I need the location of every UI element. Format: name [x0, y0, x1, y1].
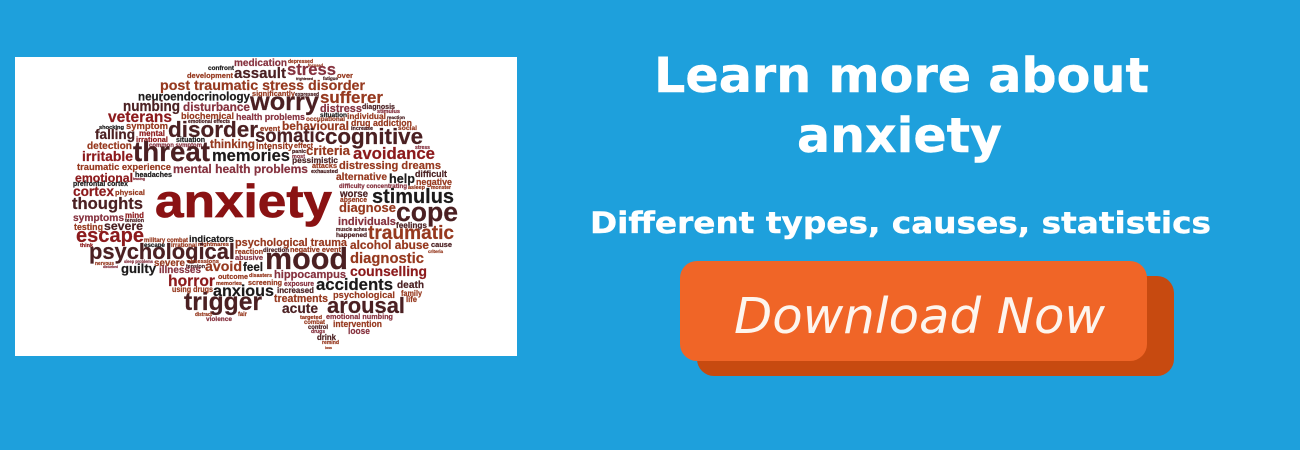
brain-shaped word cloud: increase — [351, 126, 373, 132]
brain-shaped word cloud: obsessions — [187, 259, 219, 265]
brain-shaped word cloud: panic — [292, 149, 306, 155]
brain-shaped word cloud: cause — [431, 240, 452, 249]
brain-shaped word cloud: alternative — [336, 172, 387, 183]
brain-shaped word cloud: occupational — [306, 116, 345, 123]
brain-shaped word cloud: over — [337, 71, 353, 80]
brain-shaped word cloud: direction — [263, 248, 289, 254]
subheading: Different types, causes, statistics — [590, 206, 1211, 240]
word: threat: threat — [133, 136, 210, 167]
brain-shaped word cloud: assault — [234, 65, 286, 82]
brain-shaped word cloud: development — [187, 71, 233, 80]
brain-shaped word cloud: medication — [234, 58, 287, 69]
brain-shaped word cloud: irrational — [136, 135, 168, 144]
brain-shaped word cloud: mental health problems — [173, 162, 308, 176]
brain-shaped word cloud: feelings — [396, 221, 428, 230]
button: download now: Download Now — [734, 288, 1106, 345]
brain-shaped word cloud: indicators — [189, 233, 234, 244]
brain-shaped word cloud: acute — [282, 301, 318, 316]
word: psychological: psychological — [89, 239, 235, 264]
word: anxiety: anxiety — [155, 175, 332, 227]
brain-shaped word cloud: disturbed — [103, 264, 118, 269]
brain-shaped word cloud: loss — [325, 345, 333, 350]
button: download now — [680, 261, 1174, 376]
word: worry: worry — [249, 88, 319, 116]
brain-shaped word cloud: military combat — [144, 238, 188, 244]
brain-shaped word cloud: increased — [277, 286, 314, 295]
brain-shaped word cloud: diagnostic — [350, 251, 424, 267]
brain-shaped word cloud: psychological — [333, 290, 395, 300]
brain-shaped word cloud: situation — [320, 112, 347, 119]
brain-shaped word cloud: horror — [168, 273, 215, 290]
brain-shaped word cloud: irritable — [82, 148, 133, 164]
brain-shaped word cloud: criteria — [306, 143, 351, 158]
brain-shaped word cloud: nightmares — [198, 242, 229, 248]
brain-shaped word cloud: veterans — [108, 109, 172, 126]
brain-shaped word cloud: help — [389, 172, 415, 186]
brain-shaped word cloud: emotional — [75, 171, 133, 185]
brain-shaped word cloud: health problems — [236, 112, 305, 122]
brain-shaped word cloud: nervous — [95, 261, 114, 267]
brain-shaped word cloud: fair — [238, 312, 248, 318]
brain-shaped word cloud: diagnosis — [362, 102, 395, 111]
brain-shaped word cloud: shocking — [99, 125, 125, 131]
brain-shaped word cloud: family — [401, 289, 422, 298]
brain-shaped word cloud: outcome — [218, 274, 248, 281]
brain-shaped word cloud: situation — [176, 137, 205, 144]
brain-shaped word cloud: mind — [125, 211, 144, 220]
brain-shaped word cloud: absence — [340, 197, 367, 204]
brain-shaped word cloud: drug addiction — [351, 118, 412, 128]
brain-shaped word cloud: escape — [144, 242, 166, 249]
brain-shaped word cloud: individuals — [338, 216, 396, 228]
panel: word cloud image — [15, 57, 517, 356]
brain-shaped word cloud: difficult — [415, 169, 447, 179]
brain-shaped word cloud: symptom — [126, 120, 168, 131]
brain-shaped word cloud: intensity — [256, 141, 293, 151]
brain-shaped word cloud: criteria — [428, 249, 443, 254]
brain-shaped word cloud — [72, 58, 458, 350]
brain-shaped word cloud: violence — [206, 317, 233, 323]
brain-shaped word cloud: exhausted — [311, 169, 338, 175]
brain-shaped word cloud: headaches — [135, 170, 172, 179]
brain-shaped word cloud: severe — [104, 219, 143, 233]
brain-shaped word cloud: physical — [115, 188, 145, 197]
brain-shaped word cloud: exposure — [284, 281, 314, 288]
word: trigger: trigger — [184, 289, 262, 316]
brain-shaped word cloud: stress — [287, 61, 336, 79]
brain-shaped word cloud: targeted — [300, 315, 322, 321]
brain-shaped word cloud: anxious — [213, 283, 274, 300]
brain-shaped word cloud: remind — [322, 340, 339, 346]
brain-shaped word cloud: worse — [339, 189, 369, 200]
brain-shaped word cloud: fatigue — [323, 76, 338, 81]
brain-shaped word cloud: reaction — [235, 249, 263, 256]
brain-shaped word cloud: behavioural — [282, 119, 349, 133]
brain-shaped word cloud: disturbance — [183, 100, 250, 114]
brain-shaped word cloud: expressed — [295, 92, 319, 98]
brain-shaped word cloud: severe — [154, 258, 186, 269]
brain-shaped word cloud: life — [406, 295, 418, 304]
brain-shaped word cloud: individual — [347, 111, 386, 121]
brain-shaped word cloud: depressed — [288, 59, 313, 65]
brain-shaped word cloud: attacks — [312, 163, 337, 170]
brain-shaped word cloud: disasters — [249, 273, 272, 279]
brain-shaped word cloud: illnesses — [159, 265, 201, 276]
brain-shaped word cloud: cortex — [73, 184, 114, 199]
brain-shaped word cloud: focused — [308, 63, 323, 68]
brain-shaped word cloud: hippocampus — [274, 269, 346, 281]
brain-shaped word cloud: combat — [304, 319, 326, 326]
brain-shaped word cloud: sleep problems — [124, 259, 153, 264]
brain-shaped word cloud: happened — [336, 232, 367, 239]
brain-shaped word cloud: testing — [74, 222, 103, 232]
brain-shaped word cloud: muscle aches — [336, 227, 367, 233]
brain-shaped word cloud: avoid — [205, 259, 242, 275]
brain-shaped word cloud: think — [80, 243, 94, 249]
brain-shaped word cloud: guilty — [121, 261, 157, 276]
brain-shaped word cloud: feel — [243, 261, 263, 274]
brain-shaped word cloud: abusive — [235, 253, 263, 262]
brain-shaped word cloud: asleep — [408, 185, 425, 191]
brain-shaped word cloud: mental — [139, 129, 165, 138]
brain-shaped word cloud: somatic — [255, 125, 325, 147]
brain-shaped word cloud: traumatic — [368, 223, 454, 244]
brain-shaped word cloud: teasing — [133, 177, 145, 181]
brain-shaped word cloud: death — [397, 280, 424, 291]
brain-shaped word cloud: difficulty concentrating — [339, 184, 407, 190]
brain-shaped word cloud: loose — [348, 326, 370, 336]
brain-shaped word cloud: pessimistic — [292, 155, 338, 165]
brain-shaped word cloud: social — [398, 125, 417, 132]
brain-shaped word cloud: distress — [320, 103, 362, 115]
brain-shaped word cloud: detection — [87, 141, 132, 152]
brain-shaped word cloud: prefrontal cortex — [73, 181, 128, 188]
brain-shaped word cloud: falling — [95, 127, 135, 142]
brain-shaped word cloud: stimulus — [377, 109, 400, 115]
brain-shaped word cloud: tension — [186, 264, 206, 270]
brain-shaped word cloud: tension — [125, 218, 145, 224]
brain-shaped word cloud: biochemical — [181, 111, 234, 121]
brain-shaped word cloud: numbing — [123, 99, 180, 115]
brain-shaped word cloud: effect — [294, 143, 314, 150]
brain-shaped word cloud: significantly — [252, 89, 296, 98]
brain-shaped word cloud: most — [292, 154, 305, 160]
brain-shaped word cloud: common symptom — [149, 143, 202, 149]
brain-shaped word cloud: using drugs — [172, 285, 213, 294]
brain-shaped word cloud: avoidance — [353, 144, 435, 163]
brain-shaped word cloud: treatments — [274, 293, 328, 305]
brain-shaped word cloud: frightened — [296, 76, 313, 81]
brain-shaped word cloud: accidents — [316, 275, 393, 294]
brain-shaped word cloud: event — [260, 124, 281, 133]
word: cope: cope — [396, 197, 458, 227]
brain-shaped word cloud: monster — [431, 185, 451, 191]
word: disorder: disorder — [168, 117, 258, 142]
brain-shaped word cloud: memories — [212, 147, 290, 165]
heading: learn more about anxiety: anxiety — [797, 108, 1002, 164]
brain-shaped word cloud: screening — [248, 278, 282, 287]
brain-shaped word cloud: memories — [216, 281, 242, 287]
brain-shaped word cloud: emotional effects — [188, 119, 230, 125]
brain-shaped word cloud: negative — [416, 177, 452, 187]
brain-shaped word cloud: distract — [195, 312, 212, 318]
brain-shaped word cloud: irrational — [171, 243, 197, 249]
brain-shaped word cloud: drugs — [311, 329, 325, 335]
brain-shaped word cloud: emotional numbing — [326, 312, 393, 321]
brain-shaped word cloud: intervention — [333, 319, 382, 329]
brain-shaped word cloud: neuroendocrinology — [138, 90, 251, 104]
word: arousal: arousal — [327, 293, 405, 318]
heading: learn more about anxiety — [654, 48, 1149, 164]
brain-shaped word cloud: counselling — [350, 263, 427, 279]
brain-shaped word cloud: drink — [317, 333, 337, 342]
brain-shaped word cloud: alcohol abuse — [350, 238, 429, 252]
brain-shaped word cloud: stimulus — [372, 186, 454, 208]
brain-shaped word cloud: control — [308, 325, 328, 331]
word: cognitive: cognitive — [325, 124, 423, 149]
brain-shaped word cloud: negative event — [290, 247, 342, 254]
brain-shaped word cloud: sufferer — [320, 88, 383, 107]
brain-shaped word cloud: post traumatic stress disorder — [160, 78, 365, 94]
brain-shaped word cloud: traumatic experience — [77, 161, 171, 172]
brain-shaped word cloud: symptoms — [73, 213, 124, 224]
brain-shaped word cloud: reaction — [387, 115, 405, 120]
brain-shaped word cloud: thoughts — [72, 194, 143, 213]
brain-shaped word cloud: confront — [208, 65, 235, 72]
brain-shaped word cloud: distressing dreams — [339, 160, 441, 172]
word: escape: escape — [76, 225, 144, 247]
brain-shaped word cloud: thinking — [210, 138, 255, 151]
brain-shaped word cloud: diagnose — [339, 200, 396, 215]
brain-shaped word cloud: stress — [415, 145, 430, 151]
word: mood: mood — [265, 242, 348, 276]
brain-shaped word cloud: psychological trauma — [235, 237, 348, 249]
heading: learn more about anxiety: Learn more about — [654, 48, 1149, 104]
